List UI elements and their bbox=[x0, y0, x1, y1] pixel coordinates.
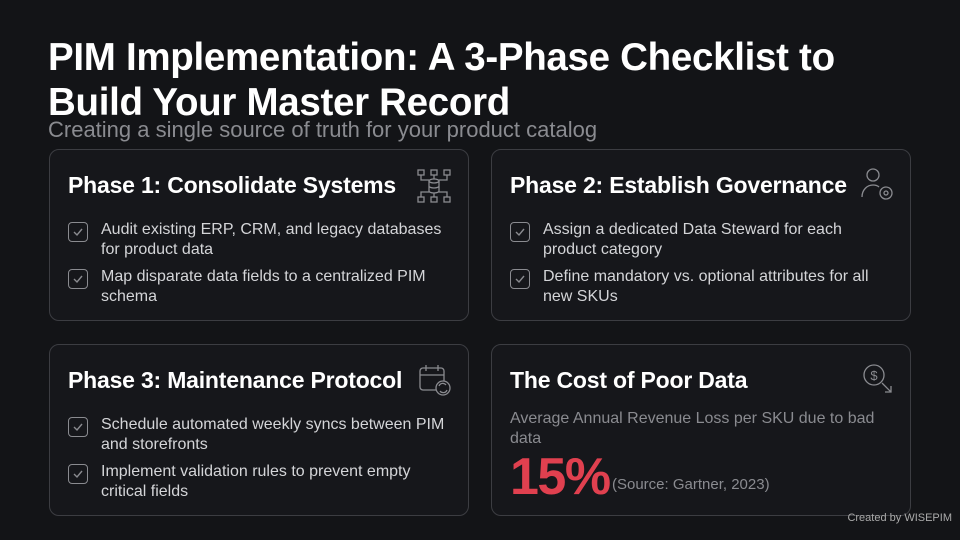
icon: dollar down: $ bbox=[870, 368, 878, 383]
title: PIM Implementation: A 3-Phase Checklist to bbox=[48, 36, 835, 79]
description: Average Annual Revenue Loss per SKU due to bad data bbox=[510, 410, 874, 447]
icon: database network bbox=[417, 169, 451, 203]
panel: cost of poor data bbox=[491, 344, 911, 516]
credit: Created by WISEPIM bbox=[847, 512, 952, 524]
heading: phase 2: Phase 2: Establish Governance bbox=[510, 172, 847, 198]
title: Build Your Master Record bbox=[48, 81, 510, 124]
panel: phase 3 bbox=[49, 344, 469, 516]
panel: phase 2 bbox=[491, 149, 911, 321]
stat: 15%: 15% bbox=[510, 448, 610, 506]
item 2: Map disparate data fields to a centralized PIM schema bbox=[101, 268, 426, 305]
heading: cost: The Cost of Poor Data bbox=[510, 367, 747, 393]
source: (Source: Gartner, 2023) bbox=[612, 476, 770, 493]
item 2: Implement validation rules to prevent empty critical fields bbox=[101, 463, 410, 500]
item 1: Audit existing ERP, CRM, and legacy databases for product data bbox=[101, 221, 441, 258]
title bbox=[48, 36, 835, 124]
subtitle: Creating a single source of truth for your product catalog bbox=[48, 117, 597, 142]
heading: phase 1: Phase 1: Consolidate Systems bbox=[68, 172, 396, 198]
panel: phase 1 bbox=[49, 149, 469, 321]
heading: phase 3: Phase 3: Maintenance Protocol bbox=[68, 367, 402, 393]
item 1: Schedule automated weekly syncs between PIM and storefronts bbox=[101, 416, 444, 453]
icon: calendar sync bbox=[419, 365, 451, 396]
item 2: Define mandatory vs. optional attributes for all new SKUs bbox=[543, 268, 868, 305]
icon: user gear bbox=[861, 168, 893, 200]
icon: dollar down bbox=[863, 364, 892, 393]
item 1: Assign a dedicated Data Steward for each product category bbox=[543, 221, 842, 258]
